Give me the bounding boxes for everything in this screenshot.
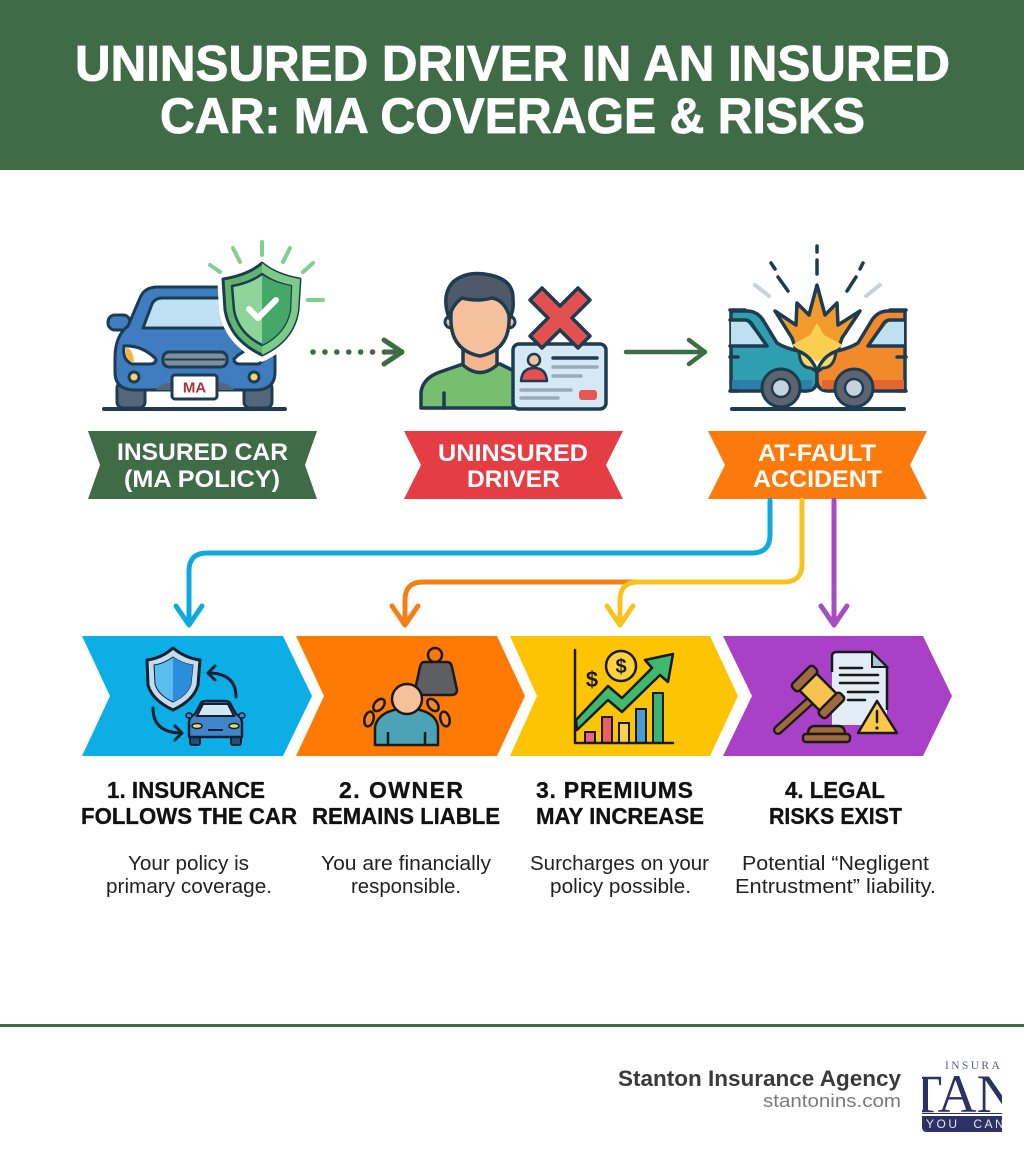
icon: rising chart: $ <box>586 667 598 692</box>
step 4 heading: 4. LEGAL <box>785 777 885 803</box>
step 3 description: Surcharges on your <box>530 853 709 875</box>
step 3 heading: 3. PREMIUMS <box>536 777 693 803</box>
icon: person with weight and chains <box>363 648 457 745</box>
title banner: CAR: MA COVERAGE & RISKS <box>160 88 865 144</box>
icon: uninsured driver with license <box>421 274 606 409</box>
arrow: to step 4 <box>821 500 847 625</box>
footer logo: TAN <box>909 1064 1016 1124</box>
license plate: MA <box>183 380 206 396</box>
label: insured car: INSURED CAR <box>117 439 288 466</box>
footer company name: Stanton Insurance Agency <box>618 1066 902 1091</box>
arrow: to step 2 <box>392 582 635 625</box>
label: at-fault accident: AT-FAULT <box>758 440 876 467</box>
icon: shield and car <box>147 648 245 745</box>
step 4 description: Potential “Negligent <box>742 853 929 875</box>
step 3 heading <box>536 777 704 829</box>
icon: insured car with shield <box>102 242 323 411</box>
step 1 chevron <box>82 636 312 756</box>
label: insured car: (MA POLICY) <box>124 466 280 493</box>
icon: rising chart <box>575 650 673 743</box>
step 4 description <box>735 853 936 898</box>
label: insured car <box>88 431 317 499</box>
label: uninsured driver: DRIVER <box>467 466 560 493</box>
step 2 description <box>321 853 491 898</box>
step 1 heading <box>81 777 297 829</box>
step 1 description: Your policy is <box>128 853 249 875</box>
dotted arrow <box>313 340 402 364</box>
footer divider <box>0 1024 1024 1027</box>
step 2 description: You are financially <box>321 853 491 875</box>
icon: car crash <box>730 246 906 411</box>
red X <box>530 288 590 348</box>
step 2 heading <box>312 777 500 829</box>
label: at-fault accident: ACCIDENT <box>753 466 882 493</box>
step 2 heading: 2. OWNER <box>339 777 463 803</box>
arrow: to step 3 <box>607 500 802 625</box>
step 1 description: primary coverage. <box>106 876 272 898</box>
chains <box>363 697 451 727</box>
step 3 chevron <box>510 636 738 756</box>
solid arrow <box>626 340 705 364</box>
step 3 heading: MAY INCREASE <box>536 803 704 829</box>
footer company name <box>618 1066 902 1111</box>
step 1 description <box>106 853 272 898</box>
step 1 heading: 1. INSURANCE <box>107 777 265 803</box>
arrow: to step 1 <box>176 500 770 625</box>
label: uninsured driver <box>404 431 623 499</box>
icon: rising chart: $ <box>615 656 627 678</box>
step 3 description: policy possible. <box>550 876 691 898</box>
step 1 heading: FOLLOWS THE CAR <box>81 803 297 829</box>
step 3 description <box>530 853 709 898</box>
label: uninsured driver: UNINSURED <box>438 440 588 467</box>
step 4 heading <box>769 777 902 829</box>
shield with check <box>210 242 323 362</box>
title banner <box>0 0 1024 170</box>
step 4 chevron <box>723 636 952 756</box>
step 2 description: responsible. <box>351 876 461 898</box>
step 4 description: Entrustment” liability. <box>735 876 936 898</box>
footer company name: stantonins.com <box>763 1091 901 1111</box>
crumpled hoods <box>799 352 836 372</box>
footer logo: YOU CAN <box>926 1117 1006 1131</box>
icon: gavel, document and warning <box>778 652 897 742</box>
step 2 chevron <box>296 636 525 756</box>
label: at-fault accident <box>708 431 927 499</box>
step 4 heading: RISKS EXIST <box>769 803 902 829</box>
title banner: UNINSURED DRIVER IN AN INSURED <box>75 36 950 92</box>
license plate <box>172 375 217 399</box>
step 2 heading: REMAINS LIABLE <box>312 803 500 829</box>
